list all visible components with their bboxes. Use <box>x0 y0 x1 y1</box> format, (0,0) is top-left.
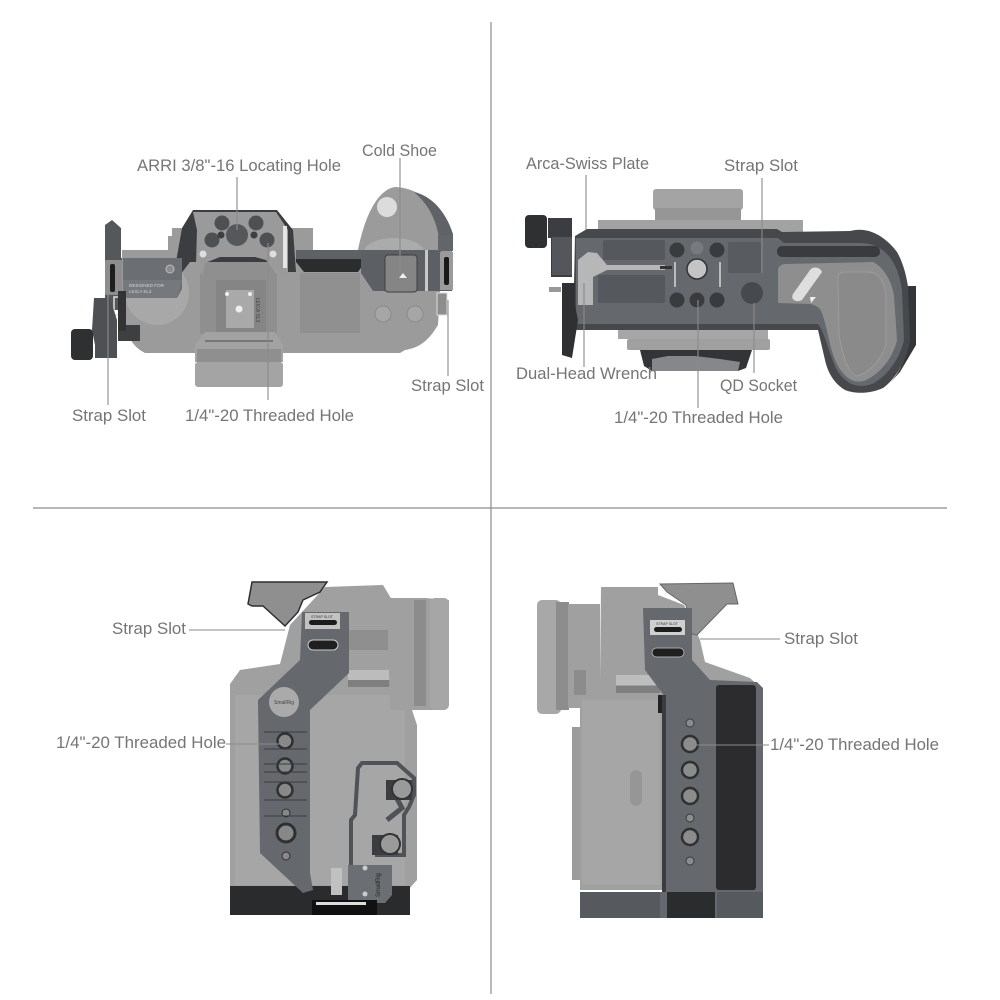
panel: bottom view <box>516 155 916 427</box>
label: strap slot: Strap Slot <box>784 630 858 648</box>
camera body right side <box>572 587 763 890</box>
cage side arm: STRAP SLOT <box>311 615 334 619</box>
cable clamp bracket <box>312 763 414 915</box>
panel: right side view <box>537 583 939 918</box>
textured grip <box>716 685 756 890</box>
cage: top plate <box>176 210 296 276</box>
label: threaded hole: 1/4"-20 Threaded Hole <box>185 407 354 425</box>
cage: left bracket and label plate <box>92 220 182 358</box>
bottom plate <box>230 886 410 915</box>
cage: left bracket and label plate: LEICA SL3 <box>129 289 152 294</box>
label: QD socket <box>720 303 797 395</box>
cable clamp bracket: SmallRig <box>376 873 382 897</box>
label: threaded hole: 1/4"-20 Threaded Hole <box>56 734 226 752</box>
label: strap slot left <box>72 292 146 425</box>
panel: top view <box>71 142 484 425</box>
label: strap slot: Strap Slot <box>112 620 186 638</box>
cage holes <box>682 719 698 865</box>
lens right side <box>537 600 600 714</box>
camera body top view: LEICA SL3 <box>254 298 260 322</box>
camera body left side <box>230 585 417 890</box>
label: arca-swiss plate <box>526 155 649 230</box>
label: ARRI locating hole: ARRI 3/8"-16 Locating Hole <box>137 157 341 175</box>
cage side arm <box>258 612 349 893</box>
label: strap slot right <box>411 300 484 395</box>
cold shoe arm <box>248 582 327 626</box>
cage: right bracket with cold shoe <box>361 192 453 315</box>
locking knob and side bracket <box>525 215 916 383</box>
mounting holes <box>660 242 724 308</box>
label: cold shoe: Cold Shoe <box>362 142 437 160</box>
cage side plate <box>580 608 763 918</box>
dual-head wrench <box>578 252 665 305</box>
label: threaded hole: 1/4"-20 Threaded Hole <box>770 736 939 754</box>
cage: handle bar <box>296 250 365 272</box>
label: strap slot: Strap Slot <box>724 157 798 175</box>
cage: locking knob <box>71 329 93 360</box>
grip pad <box>778 262 897 382</box>
lens top view <box>195 332 283 387</box>
camera body top view <box>122 187 452 353</box>
label: strap slot <box>724 157 798 273</box>
label: cold shoe <box>362 142 437 273</box>
label: threaded hole: 1/4"-20 Threaded Hole <box>614 409 783 427</box>
label: strap slot right: Strap Slot <box>411 377 484 395</box>
cage side plate: STRAP SLOT <box>656 622 679 626</box>
label: dual-head wrench: Dual-Head Wrench <box>516 365 657 383</box>
label: arca-swiss plate: Arca-Swiss Plate <box>526 155 649 173</box>
panel: left side view <box>56 582 449 915</box>
cage side arm: SmallRig <box>274 700 294 706</box>
label: QD socket: QD Socket <box>720 377 797 395</box>
cage bottom plate <box>573 229 912 393</box>
cage: left bracket and label plate: DESIGNED FOR <box>129 283 165 288</box>
cold shoe arm <box>660 583 738 635</box>
lens left side <box>387 598 449 710</box>
label: strap slot left: Strap Slot <box>72 407 146 425</box>
lens and body behind plate <box>598 189 803 371</box>
cage holes <box>264 732 307 860</box>
QD socket <box>741 282 763 304</box>
